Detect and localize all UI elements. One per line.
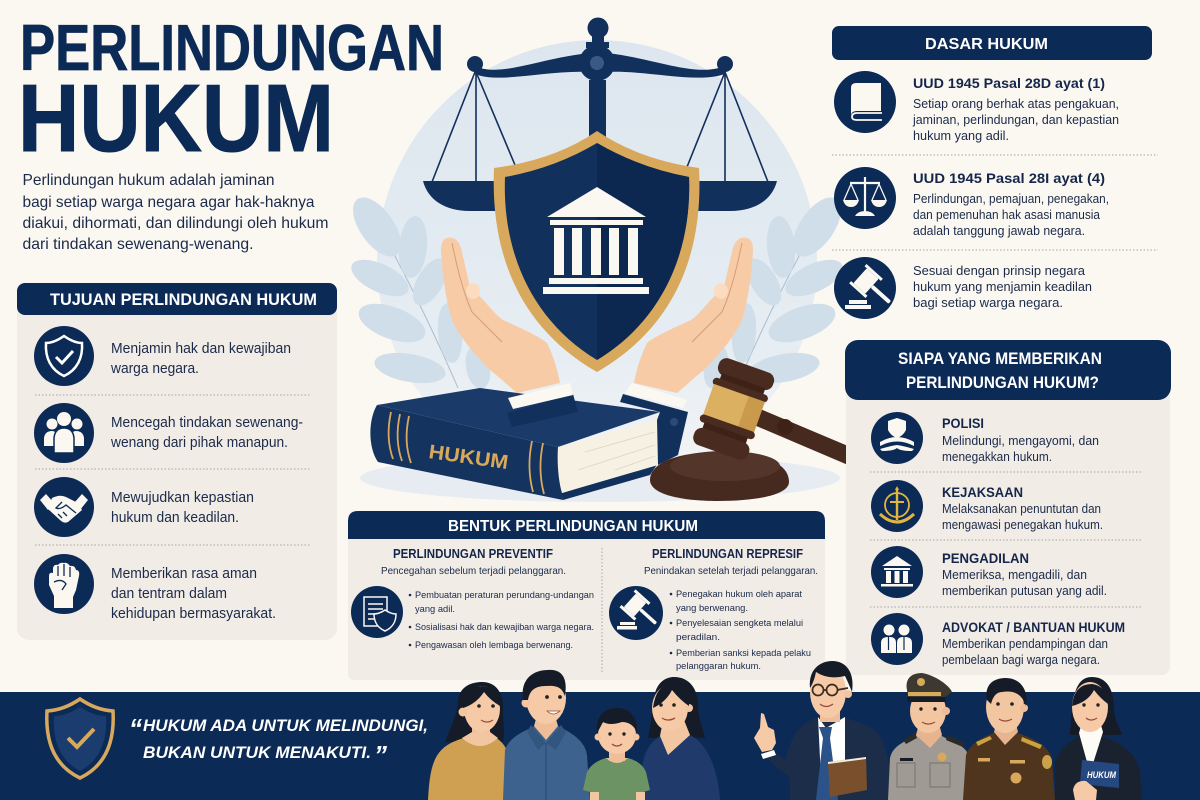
bullets: preventif: Pembuatan peraturan perundang-undangan [415, 590, 594, 601]
icon: gavel [834, 257, 898, 319]
heading: bentuk [348, 511, 825, 539]
footer band [0, 692, 1200, 800]
icon: gavel small [609, 586, 664, 640]
text: pasal 28d: Setiap orang berhak atas pengakuan, [913, 97, 1119, 111]
balance scale [423, 18, 777, 211]
icon: police cap [871, 412, 923, 464]
text: pasal 28i: adalah tanggung jawab negara. [913, 224, 1085, 238]
text: hak dan kewajiban [110, 341, 291, 377]
intro paragraph: Perlindungan hukum adalah jaminan [22, 172, 274, 189]
backdrop circle [377, 40, 817, 484]
panel: dasar hukum [832, 26, 1158, 319]
bullets: represif: yang berwenang. [676, 603, 748, 614]
icon: advocates [871, 613, 923, 665]
bullets: preventif: Sosialisasi hak dan kewajiban warga negara. [415, 622, 594, 633]
text: kejaksaan: mengawasi penegakan hukum. [942, 518, 1103, 532]
illustration: legal officials [754, 661, 1142, 800]
panel: tujuan perlindungan hukum [17, 283, 337, 640]
ground shadow [360, 454, 840, 502]
heading: siapa [845, 340, 1171, 400]
quote: HUKUM ADA UNTUK MELINDUNGI, [143, 716, 428, 735]
person: man in blue shirt [503, 670, 590, 800]
person: woman in yellow [428, 682, 515, 800]
sleeves and cuffs [507, 383, 688, 465]
quote: BUKAN UNTUK MENAKUTI. [143, 743, 371, 762]
person: child in green [583, 708, 650, 800]
text: pengadilan: PENGADILAN [942, 550, 1029, 566]
text: kepastian: Mewujudkan kepastian [111, 490, 254, 506]
person: prosecutor [963, 678, 1055, 800]
text: pasal 28i: UUD 1945 Pasal 28I ayat (4) [913, 170, 1105, 186]
icon: document shield [351, 586, 403, 638]
column: perlindungan preventif: Pencegahan sebelum terjadi pelanggaran. [381, 565, 566, 577]
text: prinsip negara: bagi setiap warga negara. [913, 296, 1063, 310]
text: kejaksaan: Melaksanakan penuntutan dan [942, 502, 1101, 516]
heading: bentuk: BENTUK PERLINDUNGAN HUKUM [448, 518, 698, 535]
icon: scale [834, 167, 896, 229]
column: perlindungan represif: Penindakan setelah terjadi pelanggaran. [644, 565, 818, 577]
text: kepastian: hukum dan keadilan. [111, 510, 239, 526]
text: pengadilan: memberikan putusan yang adil. [942, 584, 1107, 598]
text: polisi: POLISI [942, 415, 984, 431]
icon: shield check [34, 326, 94, 386]
column: perlindungan preventif [351, 547, 594, 651]
text: rasa aman [111, 566, 276, 622]
heading: tujuan: TUJUAN PERLINDUNGAN HUKUM [50, 290, 317, 309]
text: mencegah: Mencegah tindakan sewenang- [111, 415, 303, 431]
text: rasa aman: Memberikan rasa aman [111, 566, 257, 582]
bullets: preventif: Pengawasan oleh lembaga berwenang. [415, 640, 573, 651]
bullets: represif: peradilan. [676, 632, 720, 643]
heading: dasar hukum [832, 26, 1152, 60]
column: perlindungan preventif: PERLINDUNGAN PREVENTIF [393, 547, 553, 561]
icon: courthouse [871, 546, 923, 598]
icon: handshake [34, 477, 94, 537]
person: woman advocate [1055, 677, 1142, 800]
bullets: represif [670, 589, 811, 672]
central illustration [344, 18, 850, 502]
heading: dasar hukum: DASAR HUKUM [925, 36, 1048, 53]
quote: “ [129, 713, 142, 743]
text: mencegah: wenang dari pihak manapun. [110, 435, 288, 451]
text: advokat: pembelaan bagi warga negara. [942, 653, 1100, 667]
text: rasa aman: dan tentram dalam [111, 586, 227, 602]
panel: bentuk perlindungan hukum [348, 511, 825, 680]
laurel leaves right [700, 189, 850, 391]
bullets: preventif [409, 590, 594, 651]
law book [370, 388, 660, 500]
text: polisi: Melindungi, mengayomi, dan [942, 434, 1099, 448]
text: advokat: Memberikan pendampingan dan [942, 637, 1108, 651]
icon: people group [34, 403, 94, 463]
bullets: represif: Penegakan hukum oleh aparat [676, 589, 802, 600]
illustration: family [428, 670, 720, 800]
text: kepastian [111, 490, 254, 526]
quote: ” [374, 740, 387, 770]
heading: siapa: PERLINDUNGAN HUKUM? [906, 373, 1099, 392]
bullets: represif: Penyelesaian sengketa melalui [676, 618, 803, 629]
text: rasa aman: kehidupan bermasyarakat. [111, 606, 276, 622]
text: pasal 28i: Perlindungan, pemajuan, penegakan, [913, 192, 1109, 206]
icon: fist [34, 554, 94, 614]
main title [18, 11, 444, 172]
text: kejaksaan [942, 484, 1103, 532]
text: pasal 28d: jaminan, perlindungan, dan kepastian [912, 113, 1119, 127]
text: advokat [942, 619, 1125, 667]
text: prinsip negara: Sesuai dengan prinsip negara [913, 264, 1085, 278]
icon: gold shield [47, 699, 113, 778]
text: polisi: menegakkan hukum. [942, 450, 1052, 464]
text: advokat: ADVOKAT / BANTUAN HUKUM [942, 619, 1125, 635]
text: pasal 28d: hukum yang adil. [913, 129, 1009, 143]
text: pasal 28d [912, 75, 1119, 143]
text: prinsip negara: hukum yang menjamin keadilan [913, 280, 1092, 294]
main title: PERLINDUNGAN [20, 11, 444, 84]
text: pasal 28i [913, 170, 1109, 238]
panel: siapa yang memberikan [845, 340, 1171, 675]
text: mencegah [110, 415, 303, 451]
heading: siapa: SIAPA YANG MEMBERIKAN [898, 349, 1102, 368]
text: pasal 28i: dan pemenuhan hak asasi manusia [913, 208, 1100, 222]
bullets: represif: Pemberian sanksi kepada pelaku [676, 648, 811, 659]
bullets: preventif: yang adil. [415, 604, 455, 615]
text: pengadilan [942, 550, 1107, 598]
bullets: represif: pelanggaran hukum. [676, 661, 761, 672]
text: pengadilan: Memeriksa, mengadili, dan [942, 568, 1087, 582]
text: hak dan kewajiban: Menjamin hak dan kewajiban [111, 341, 291, 357]
person: woman advocate: HUKUM [1087, 770, 1117, 781]
person: lawyer [754, 661, 893, 800]
left hand [441, 238, 560, 393]
main title: HUKUM [18, 65, 334, 172]
intro paragraph [22, 172, 328, 253]
text: pasal 28d: UUD 1945 Pasal 28D ayat (1) [913, 75, 1105, 91]
text: prinsip negara [913, 264, 1092, 310]
law book: HUKUM [427, 441, 510, 474]
gavel [650, 356, 848, 501]
intro paragraph: diakui, dihormati, dan dilindungi oleh hukum [22, 215, 328, 232]
shield with courthouse [494, 131, 699, 372]
laurel leaves left [344, 189, 494, 391]
column: perlindungan represif [609, 547, 818, 672]
icon: kejaksaan emblem [871, 480, 923, 532]
column: perlindungan represif: PERLINDUNGAN REPRESIF [652, 547, 803, 561]
person: woman in navy [640, 677, 720, 800]
quote [129, 713, 428, 770]
heading: tujuan [17, 283, 337, 315]
intro paragraph: bagi setiap warga negara agar hak-haknya [22, 194, 315, 211]
text: hak dan kewajiban: warga negara. [110, 361, 199, 377]
text: polisi [942, 415, 1099, 464]
text: kejaksaan: KEJAKSAAN [942, 484, 1023, 500]
right hand [634, 238, 753, 393]
icon: book [834, 71, 896, 133]
person: police officer [888, 673, 970, 800]
intro paragraph: dari tindakan sewenang-wenang. [22, 236, 254, 253]
